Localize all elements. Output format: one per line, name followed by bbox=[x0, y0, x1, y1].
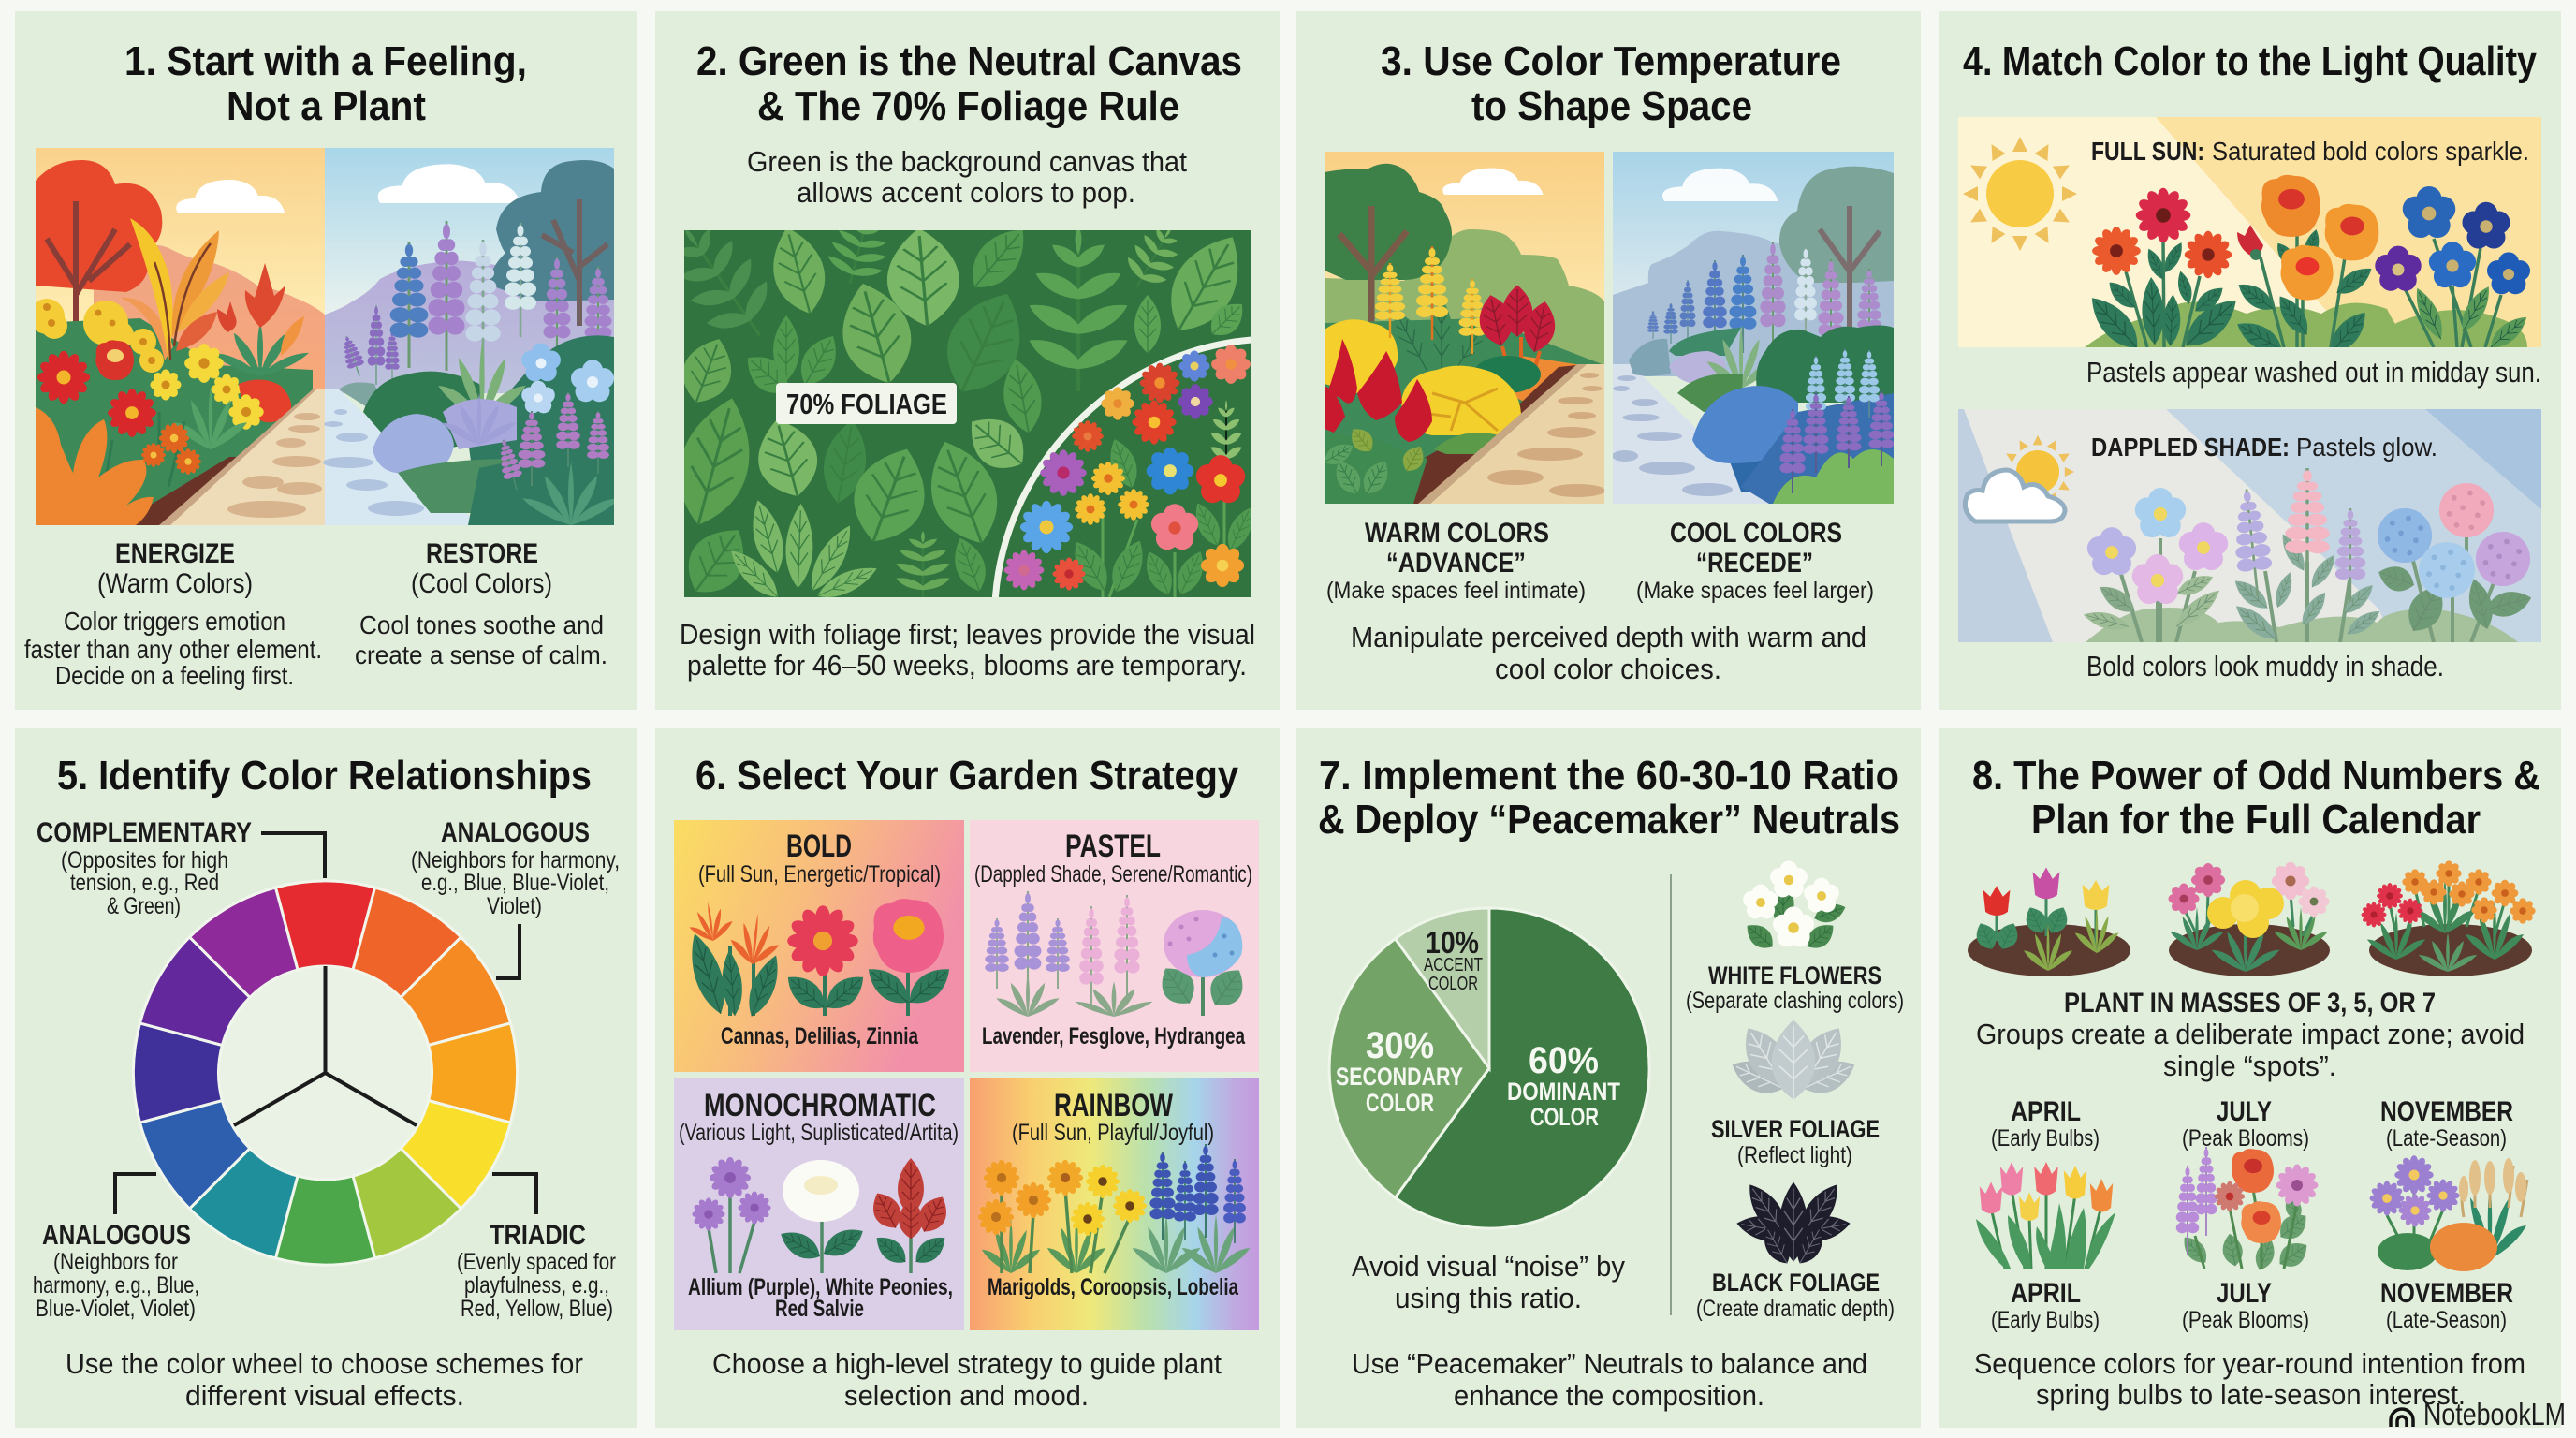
text: color triggers emotion: Decide on a feeling first. bbox=[55, 661, 294, 690]
callout: 70% foliage: 70% FOLIAGE bbox=[786, 388, 947, 420]
label: energize warm colors bbox=[97, 538, 253, 599]
caption: panel 3: Manipulate perceived depth with warm and bbox=[1351, 621, 1866, 653]
label: silver foliage: (Reflect light) bbox=[1737, 1142, 1852, 1168]
icon: silver foliage bbox=[1726, 1019, 1861, 1101]
label: energize warm colors: ENERGIZE bbox=[115, 538, 235, 569]
label: april early bulbs bottom bbox=[1991, 1278, 2100, 1333]
label: november late season bottom bbox=[2380, 1278, 2513, 1333]
caption: panel 2: Design with foliage first; leaves provide the visual bbox=[680, 618, 1255, 651]
label: black foliage: BLACK FOLIAGE bbox=[1712, 1269, 1880, 1297]
label: black foliage: (Create dramatic depth) bbox=[1696, 1296, 1895, 1322]
label: warm colors advance: WARM COLORS bbox=[1365, 518, 1549, 549]
heading: panel 7: 7. Implement the 60-30-10 Ratio bbox=[1319, 753, 1899, 799]
caption: panel 7 bbox=[1352, 1347, 1867, 1412]
pie chart: 60-30-10: 30% bbox=[1366, 1025, 1434, 1066]
label: analogous bottom: Blue-Violet, Violet) bbox=[36, 1296, 196, 1322]
pie chart: 60-30-10: COLOR bbox=[1530, 1103, 1599, 1131]
text: plant in masses bbox=[1976, 988, 2525, 1082]
icon: black foliage bbox=[1734, 1178, 1852, 1269]
heading: panel 2: & The 70% Foliage Rule bbox=[757, 83, 1179, 129]
heading: panel 5: 5. Identify Color Relationships bbox=[57, 753, 592, 799]
tile: rainbow: Marigolds, Coroopsis, Lobelia bbox=[988, 1274, 1239, 1300]
label: july peak blooms top bbox=[2182, 1096, 2309, 1152]
text: plant in masses: PLANT IN MASSES OF 3, 5, OR 7 bbox=[2064, 988, 2436, 1019]
text: dappled shade bbox=[2091, 433, 2437, 462]
panel: 5. Identify Color Relationships bbox=[15, 728, 637, 1428]
label: triadic: (Evenly spaced for bbox=[457, 1249, 616, 1275]
caption: avoid visual noise: using this ratio. bbox=[1395, 1282, 1582, 1314]
text: full sun: Saturated bold colors sparkle. bbox=[2212, 137, 2529, 166]
label: analogous bottom: harmony, e.g., Blue, bbox=[33, 1272, 199, 1299]
heading: panel 1: 1. Start with a Feeling, bbox=[124, 38, 527, 84]
illustration: warm and cool garden split bbox=[29, 148, 620, 525]
label: triadic: Red, Yellow, Blue) bbox=[461, 1296, 613, 1322]
pie chart: 60-30-10: SECONDARY bbox=[1336, 1063, 1463, 1091]
label: analogous top: (Neighbors for harmony, bbox=[411, 847, 620, 873]
label: energize warm colors: (Warm Colors) bbox=[97, 568, 253, 599]
text: cool tones soothe: create a sense of calm. bbox=[355, 640, 607, 669]
icon: sun bbox=[1963, 137, 2077, 251]
intro text: allows accent colors to pop. bbox=[797, 176, 1135, 209]
text: full sun bbox=[2091, 137, 2529, 166]
connector: triadic bbox=[492, 1174, 536, 1214]
label: november late season top: (Late-Season) bbox=[2386, 1125, 2507, 1152]
label: april early bulbs bottom: APRIL bbox=[2011, 1278, 2081, 1309]
text: plant in masses: single “spots”. bbox=[2163, 1049, 2336, 1082]
label: cool colors recede: COOL COLORS bbox=[1670, 518, 1842, 549]
text: color triggers emotion bbox=[24, 607, 322, 690]
label: complementary: & Green) bbox=[107, 893, 181, 919]
tile: monochromatic bbox=[674, 1078, 964, 1330]
label: white flowers bbox=[1686, 961, 1904, 1014]
caption: panel 5: different visual effects. bbox=[185, 1379, 464, 1412]
connector: analogous bottom bbox=[115, 1174, 156, 1214]
label: july peak blooms top: JULY bbox=[2217, 1096, 2272, 1127]
intro text bbox=[747, 145, 1187, 209]
panel: 4. Match Color to the Light Quality bbox=[1939, 11, 2561, 710]
caption: panel 5: Use the color wheel to choose schemes for bbox=[66, 1347, 583, 1380]
illustration: bed of seven bbox=[2361, 860, 2536, 976]
heading: panel 1: Not a Plant bbox=[227, 83, 426, 129]
heading: panel 3: 3. Use Color Temperature bbox=[1381, 38, 1841, 84]
label: complementary bbox=[37, 817, 252, 919]
caption: panel 3 bbox=[1351, 621, 1866, 685]
pie chart: 60-30-10: 60% bbox=[1529, 1040, 1599, 1081]
illustration: warm garden advancing bbox=[1320, 152, 1605, 504]
panel: 2. Green is the Neutral Canvas bbox=[654, 11, 1280, 710]
label: warm colors advance bbox=[1326, 518, 1586, 604]
text: cool tones soothe bbox=[355, 610, 607, 669]
label: cool colors recede: (Make spaces feel larger) bbox=[1636, 578, 1874, 604]
label: analogous top: ANALOGOUS bbox=[441, 817, 590, 848]
label: analogous bottom bbox=[33, 1220, 199, 1322]
text: dappled shade: Pastels glow. bbox=[2296, 433, 2437, 462]
illustration: november plants bbox=[2370, 1155, 2527, 1271]
caption: panel 8: spring bulbs to late-season interest. bbox=[2036, 1378, 2466, 1411]
tile: rainbow: (Full Sun, Playful/Joyful) bbox=[1012, 1120, 1214, 1146]
panel: 3. Use Color Temperature bbox=[1296, 11, 1921, 710]
illustration: dappled shade flowers bbox=[1958, 409, 2541, 646]
illustration: bed of three bbox=[1968, 868, 2130, 976]
label: analogous top: Violet) bbox=[487, 893, 542, 919]
panel: 7. Implement the 60-30-10 Ratio bbox=[1296, 728, 1921, 1428]
chart: color wheel bbox=[134, 881, 517, 1265]
tile: rainbow: RAINBOW bbox=[1054, 1088, 1174, 1123]
pie chart: 60-30-10: ACCENT bbox=[1424, 955, 1483, 976]
label: analogous bottom: ANALOGOUS bbox=[42, 1220, 191, 1251]
callout: 70% foliage bbox=[776, 383, 957, 424]
panel: 8. The Power of Odd Numbers bbox=[1939, 728, 2561, 1428]
caption: panel 6 bbox=[712, 1347, 1222, 1412]
heading: panel 3: to Shape Space bbox=[1471, 83, 1752, 129]
label: april early bulbs bottom: (Early Bulbs) bbox=[1991, 1307, 2100, 1333]
heading: panel 3 bbox=[1381, 38, 1841, 129]
tile: rainbow bbox=[970, 1078, 1259, 1330]
caption: bold colors muddy: Bold colors look muddy in shade. bbox=[2086, 650, 2444, 682]
panel: 6. Select Your Garden Strategy bbox=[655, 728, 1280, 1428]
icon: white flowers bbox=[1741, 861, 1849, 954]
tile: bold: BOLD bbox=[786, 829, 852, 864]
label: april early bulbs top: (Early Bulbs) bbox=[1991, 1125, 2100, 1152]
label: restore cool colors: RESTORE bbox=[426, 538, 538, 569]
heading: panel 8 bbox=[1972, 753, 2540, 843]
heading: panel 8: Plan for the Full Calendar bbox=[2031, 797, 2481, 843]
caption: panel 3: cool color choices. bbox=[1495, 653, 1721, 685]
tile: bold: Cannas, Delilias, Zinnia bbox=[721, 1023, 919, 1049]
label: july peak blooms bottom bbox=[2182, 1278, 2309, 1333]
illustration: cool garden receding bbox=[1612, 152, 1895, 504]
label: cool colors recede: “RECEDE” bbox=[1696, 548, 1813, 579]
connector: complementary bbox=[261, 833, 325, 878]
label: white flowers: WHITE FLOWERS bbox=[1708, 961, 1881, 990]
caption: avoid visual noise: Avoid visual “noise” by bbox=[1352, 1250, 1625, 1283]
label: cool colors recede bbox=[1636, 518, 1874, 604]
label: warm colors advance: (Make spaces feel intimate) bbox=[1326, 578, 1586, 604]
label: complementary: COMPLEMENTARY bbox=[37, 817, 252, 848]
panel: 1. Start with a Feeling bbox=[15, 11, 637, 710]
label: restore cool colors: (Cool Colors) bbox=[411, 568, 552, 599]
label: triadic bbox=[457, 1220, 616, 1322]
connector: analogous top bbox=[496, 924, 520, 978]
label: restore cool colors bbox=[411, 538, 552, 599]
icon: sun behind cloud bbox=[1965, 435, 2074, 521]
label: november late season bottom: NOVEMBER bbox=[2380, 1278, 2513, 1309]
illustration: foliage pattern with flower corner bbox=[684, 230, 1251, 597]
label: november late season top bbox=[2380, 1096, 2513, 1152]
label: analogous top: e.g., Blue, Blue-Violet, bbox=[421, 870, 609, 896]
illustration: april tulips bbox=[1976, 1162, 2115, 1269]
tile: bold: (Full Sun, Energetic/Tropical) bbox=[698, 861, 941, 888]
tile: monochromatic: MONOCHROMATIC bbox=[704, 1088, 936, 1123]
label: april early bulbs top bbox=[1991, 1096, 2100, 1152]
caption: panel 6: Choose a high-level strategy to guide plant bbox=[712, 1347, 1222, 1380]
text: plant in masses: Groups create a deliberate impact zone; avoid bbox=[1976, 1018, 2525, 1050]
caption: panel 2 bbox=[680, 618, 1255, 682]
text: cool tones soothe: Cool tones soothe and bbox=[359, 610, 604, 639]
label: warm colors advance: “ADVANCE” bbox=[1386, 548, 1526, 579]
text: color triggers emotion: Color triggers emotion bbox=[64, 607, 285, 636]
label: november late season top: NOVEMBER bbox=[2380, 1096, 2513, 1127]
label: analogous top bbox=[411, 817, 620, 919]
caption: panel 6: selection and mood. bbox=[844, 1379, 1089, 1412]
caption: avoid visual noise bbox=[1352, 1250, 1625, 1314]
intro text: Green is the background canvas that bbox=[747, 145, 1187, 178]
label: triadic: playfulness, e.g., bbox=[464, 1272, 609, 1299]
label: silver foliage bbox=[1711, 1115, 1880, 1168]
label: silver foliage: SILVER FOLIAGE bbox=[1711, 1115, 1880, 1143]
label: analogous bottom: (Neighbors for bbox=[53, 1249, 178, 1275]
label: complementary: tension, e.g., Red bbox=[70, 870, 219, 896]
tile: monochromatic: Allium (Purple), White Peonies, bbox=[688, 1274, 953, 1300]
divider bbox=[1670, 874, 1672, 1315]
pie chart: 60-30-10: 10% bbox=[1426, 925, 1479, 960]
label: november late season bottom: (Late-Season) bbox=[2386, 1307, 2507, 1333]
heading: panel 6: 6. Select Your Garden Strategy bbox=[695, 753, 1238, 799]
tile: pastel: Lavender, Fesglove, Hydrangea bbox=[982, 1023, 1246, 1049]
heading: panel 1 bbox=[124, 38, 527, 129]
label: triadic: TRIADIC bbox=[490, 1220, 586, 1251]
caption: panel 8: Sequence colors for year-round intention from bbox=[1974, 1347, 2525, 1380]
pie chart: 60-30-10 bbox=[1329, 908, 1649, 1228]
pie chart: 60-30-10: DOMINANT bbox=[1507, 1078, 1620, 1106]
illustration: full sun flowers bbox=[1958, 117, 2541, 360]
illustration: bed of five bbox=[2168, 862, 2330, 976]
label: complementary: (Opposites for high bbox=[61, 847, 228, 873]
text: full sun: FULL SUN: bbox=[2091, 137, 2204, 166]
label: april early bulbs top: APRIL bbox=[2011, 1096, 2081, 1127]
caption: panel 8 bbox=[1974, 1347, 2525, 1411]
text: color triggers emotion: faster than any other element. bbox=[24, 635, 322, 664]
pie chart: 60-30-10: COLOR bbox=[1366, 1089, 1434, 1117]
label: july peak blooms bottom: JULY bbox=[2217, 1278, 2272, 1309]
tile: monochromatic: (Various Light, Suplisticated/Artita) bbox=[679, 1120, 959, 1146]
pie chart: 60-30-10: COLOR bbox=[1428, 974, 1478, 994]
label: white flowers: (Separate clashing colors) bbox=[1686, 988, 1904, 1014]
tile: pastel: PASTEL bbox=[1065, 829, 1161, 864]
heading: panel 7 bbox=[1318, 753, 1900, 843]
tile: pastel bbox=[970, 820, 1259, 1072]
tile: pastel: (Dappled Shade, Serene/Romantic) bbox=[974, 861, 1252, 888]
tile: bold bbox=[674, 820, 964, 1072]
heading: panel 2 bbox=[696, 38, 1242, 129]
illustration: july blooms bbox=[2176, 1147, 2318, 1273]
tile: monochromatic: Red Salvie bbox=[775, 1296, 864, 1322]
caption: panel 7: Use “Peacemaker” Neutrals to balance and bbox=[1352, 1347, 1867, 1380]
label: black foliage bbox=[1696, 1269, 1895, 1322]
label: july peak blooms bottom: (Peak Blooms) bbox=[2182, 1307, 2309, 1333]
heading: panel 7: & Deploy “Peacemaker” Neutrals bbox=[1318, 797, 1900, 843]
caption: panel 5 bbox=[66, 1347, 583, 1412]
caption: panel 2: palette for 46–50 weeks, blooms are temporary. bbox=[687, 649, 1247, 682]
caption: panel 7: enhance the composition. bbox=[1454, 1379, 1764, 1412]
label: july peak blooms top: (Peak Blooms) bbox=[2182, 1125, 2309, 1152]
text: dappled shade: DAPPLED SHADE: bbox=[2091, 433, 2290, 462]
heading: panel 2: 2. Green is the Neutral Canvas bbox=[696, 38, 1242, 84]
